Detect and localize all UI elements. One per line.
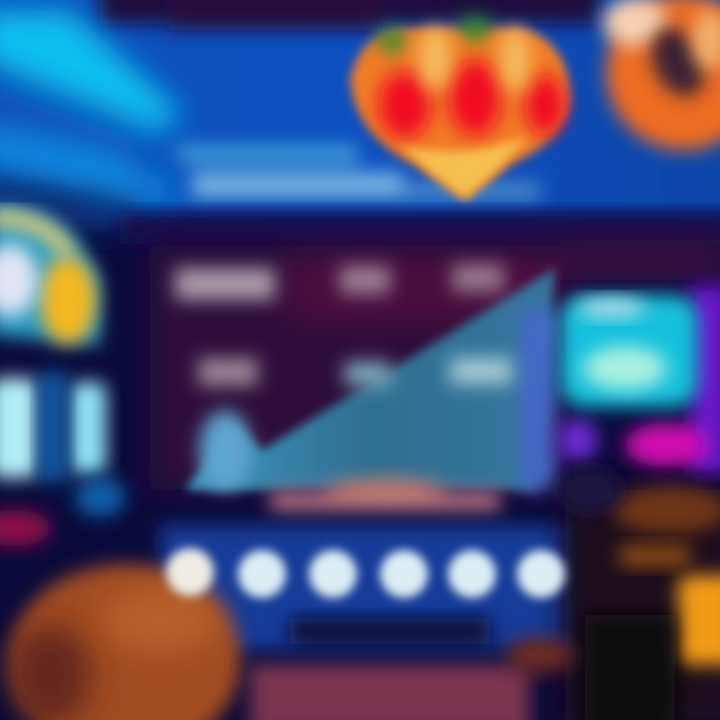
bottom right furniture [506,468,720,720]
cyan screen [560,295,698,407]
top dark band [100,0,600,30]
six timeline dots [166,548,565,598]
panel text blocks [175,264,512,386]
cyan light streaks [0,10,190,205]
top right round emblem [603,0,720,150]
left rainbow arc icon [0,205,100,345]
bottom mauve floor [250,664,530,720]
blue timeline band [160,525,570,650]
crown emblem [350,16,570,200]
crown green tips [377,16,530,92]
salmon banner [270,478,500,512]
brown ball [9,564,241,720]
crown red spots [379,60,565,139]
right purple and magenta glow [558,285,720,475]
teal triangle chart [185,268,556,490]
dark header divider band [120,214,720,244]
dark lower band [290,618,490,644]
main dark maroon panel [150,240,720,490]
left bright windows [0,372,125,546]
heading text block [178,145,540,200]
